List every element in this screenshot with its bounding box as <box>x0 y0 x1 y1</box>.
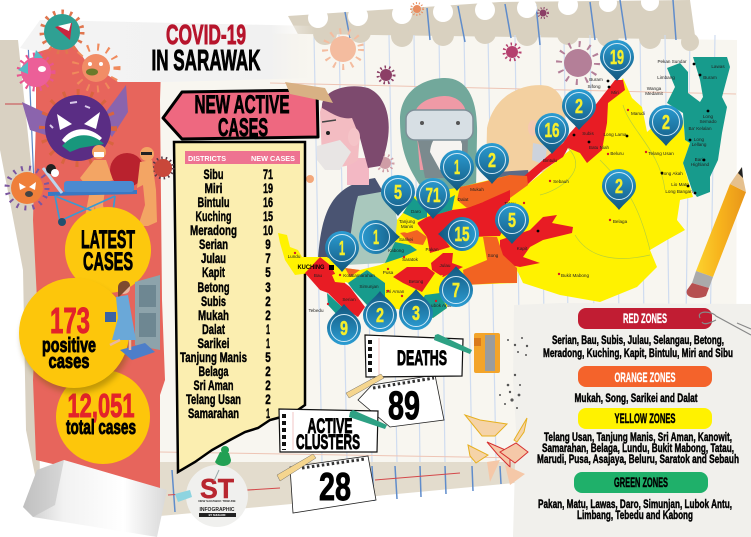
icon: orange angry virus <box>7 168 47 208</box>
tape: deaths teal <box>434 334 472 354</box>
map: place labels: Sebauh <box>553 179 569 184</box>
map: place labels: Long Lama <box>604 132 627 137</box>
table rows: 5 <box>265 349 271 365</box>
pin: Kapit 5 <box>495 203 529 244</box>
table rows: Sri Aman <box>194 377 234 393</box>
map: place labels: Samarahan <box>351 273 375 278</box>
map: place labels: Long Bangan <box>665 189 693 194</box>
tape: clusters yellow <box>277 454 316 481</box>
pin: Betong 3 <box>399 289 433 330</box>
map: red zone Kapit <box>500 215 573 267</box>
table rows: Dalat <box>202 321 225 337</box>
icon: green pushpin <box>214 446 231 481</box>
map: red zone Betong <box>393 267 435 292</box>
callout: latest cases: CASES <box>83 248 133 276</box>
table rows: Samarahan <box>188 405 239 421</box>
legend: yellow zones <box>537 408 739 466</box>
callout: positive cases <box>19 278 131 393</box>
icon: orange virus <box>75 47 117 89</box>
map: place labels: Batu Niah <box>589 145 610 150</box>
table header: DISTRICTS <box>188 156 226 163</box>
pin: Bintulu 16: 16 <box>544 120 560 142</box>
map: place labels: Buram <box>703 75 717 80</box>
map: green zone Daro <box>403 197 427 220</box>
map: place labels: Tanjung <box>399 219 415 224</box>
note: deaths number: 89 <box>388 384 420 428</box>
map: place labels: Pusa <box>383 270 394 275</box>
map: place labels: Telang Usan <box>648 151 674 156</box>
table rows: Subis <box>201 293 226 309</box>
table rows: 1 <box>266 321 270 337</box>
legend: orange zones: Mukah, Song, Sarikei and Dalat <box>574 391 698 405</box>
map: place labels: Bintulu <box>543 158 557 163</box>
map: red zone central <box>427 190 510 240</box>
pin: Serian 9: 9 <box>340 318 348 340</box>
icon: teal virus <box>42 12 82 52</box>
table header <box>185 151 300 164</box>
title <box>152 19 261 77</box>
map: yellow zone Sri Aman <box>387 285 413 310</box>
map: place labels: Long <box>703 114 714 119</box>
pin: Bintulu 16 <box>535 113 569 154</box>
map: green zone Lubok Antu <box>417 293 447 318</box>
map: yellow base central and west <box>327 175 520 318</box>
map: green zone Simunjan <box>348 270 385 305</box>
map: place labels: Lubok Antu <box>428 303 452 308</box>
tape: clusters teal <box>349 410 387 429</box>
table rows: Sarikei <box>198 335 230 351</box>
map: green zone Tebedu <box>327 293 357 318</box>
icon: safety pin <box>699 312 751 335</box>
callout: latest cases: LATEST <box>81 226 135 254</box>
map: place labels: Limbang <box>657 75 675 80</box>
illustration: stretcher and medics <box>43 145 157 226</box>
table rows: Meradong <box>190 222 237 238</box>
map: place labels: Subis <box>582 131 594 136</box>
table rows: Telang Usan <box>186 391 241 407</box>
map: place labels: Wanga <box>647 86 662 91</box>
table rows: 2 <box>265 293 271 309</box>
legend: green zones <box>538 472 732 522</box>
tape: deaths yellow <box>346 374 384 398</box>
legend: green zones: Limbang, Tebedu and Kabong <box>577 508 693 522</box>
map: place labels: Betong <box>409 279 424 284</box>
note: active clusters label <box>279 409 378 454</box>
map: green zone Matu <box>435 195 455 215</box>
map: place labels: Medamit <box>645 91 664 96</box>
icon: pencil sharpener <box>474 333 500 373</box>
map: red zone Miri Bintulu coast <box>523 80 625 185</box>
pin: Sibu 71 <box>416 178 450 219</box>
map: green zones north east <box>667 57 730 197</box>
pin: Betong 3: 3 <box>412 303 420 325</box>
title: IN SARAWAK <box>152 45 261 77</box>
map: place labels: Pakan <box>425 247 439 252</box>
note: deaths number <box>358 375 444 428</box>
map: place labels: Julau <box>440 263 451 268</box>
heading: new active cases <box>194 91 290 142</box>
table rows: Belaga <box>198 363 229 379</box>
pin: Samarahan 1 <box>325 231 359 272</box>
table rows: Serian <box>199 236 228 252</box>
pin: Dalat 1 <box>440 150 474 191</box>
pin: Samarahan 1: 1 <box>339 238 345 260</box>
illustration: PPE medic <box>400 78 477 192</box>
map: orange zone small <box>345 268 360 277</box>
callout: positive cases: positive <box>42 335 96 357</box>
legend: orange zones: ORANGE ZONES <box>614 369 676 385</box>
map: place labels: Lundu <box>288 254 301 259</box>
table rows: 2 <box>265 391 271 407</box>
map: orange zone Song <box>463 237 517 285</box>
map: place labels: Kabong <box>388 248 404 253</box>
legend: yellow zones: YELLOW ZONES <box>614 410 676 426</box>
map: place labels: Sri Aman <box>386 289 405 294</box>
table rows: 1 <box>266 405 270 421</box>
logo: ST infographic badge: BY SHUHAIDI <box>209 513 226 517</box>
pin: Tanjung Manis 5 <box>381 175 415 216</box>
logo: ST infographic badge: NEW SARAWAK TRIBUNE <box>198 499 236 503</box>
panel: red side strip <box>33 38 165 490</box>
icon: purple virus monster <box>22 85 128 164</box>
note: clusters number <box>290 456 376 513</box>
map: place labels: Long Akah <box>661 171 683 176</box>
table rows: Tanjung Manis <box>180 349 247 365</box>
pin: Meradong 15 <box>438 217 479 251</box>
map: place labels: Belaga <box>613 219 628 224</box>
map: yellow zone Pusa <box>380 257 417 283</box>
map: place labels: Miri <box>611 90 619 95</box>
icon: pink virus <box>18 50 53 89</box>
map: district borders <box>540 105 665 258</box>
pin: Sri Aman 2: 2 <box>376 305 384 327</box>
table rows: 1 <box>266 335 270 351</box>
icon: pencil shavings <box>465 415 528 485</box>
map: place labels: Simunjan <box>359 284 379 289</box>
pin: Subis 2 <box>562 89 596 130</box>
table rows: 16 <box>263 194 273 210</box>
map: place labels: KUCHING <box>298 264 324 271</box>
table rows: Mukah <box>198 307 229 323</box>
title torn paper band <box>20 20 315 82</box>
pin: Tanjung Manis 5: 5 <box>394 182 402 204</box>
icon: red small virus <box>153 158 173 178</box>
note: active clusters label: ACTIVE <box>308 415 352 438</box>
tape on tag <box>285 82 333 103</box>
map: place labels: Beluru <box>610 151 624 156</box>
map: yellow zone Tanjung Manis <box>397 213 418 233</box>
logo: ST infographic badge: ST <box>200 473 234 504</box>
callout: total cases: 12,051 <box>68 387 134 424</box>
map: yellow zone Kota <box>332 272 348 283</box>
pin: Mukah 2 <box>475 143 509 184</box>
note: deaths label <box>365 335 463 377</box>
table header: NEW CASES <box>251 156 295 163</box>
illustration: woman leaving door <box>105 275 160 360</box>
table rows: 2 <box>265 363 271 379</box>
map: green zone Kabong <box>385 242 417 263</box>
callout: positive cases: cases <box>48 351 90 373</box>
table rows: 5 <box>265 264 271 280</box>
icon: pencil <box>687 167 746 298</box>
map: place labels: Sifong <box>587 84 601 89</box>
map: place labels: Kapit <box>517 246 528 251</box>
map: place labels: Bau <box>314 273 323 278</box>
pin: Subis 2: 2 <box>575 96 583 118</box>
pin: Sarikei 1: 1 <box>373 227 379 249</box>
table rows: Betong <box>198 279 230 295</box>
map: yellow zone Tatau <box>450 237 487 267</box>
note: deaths label: DEATHS <box>397 347 447 370</box>
pin: Sarikei 1 <box>359 220 400 254</box>
pin: Miri 19 <box>600 40 634 81</box>
map: place labels: Saratok <box>402 257 419 262</box>
map: place labels: Lawas <box>711 64 725 69</box>
table rows <box>180 166 273 421</box>
legend: orange zones <box>574 366 712 405</box>
map: red zone Meradong <box>417 217 450 253</box>
map of Sarawak <box>278 57 730 318</box>
map: place labels: Daro <box>411 209 421 214</box>
note: clusters number: 28 <box>319 466 351 509</box>
map: place labels: Sarikei <box>399 237 413 242</box>
map: red zone Bau Kuching Serian <box>305 257 365 317</box>
table rows: Bintulu <box>198 194 230 210</box>
table rows: 15 <box>263 208 273 224</box>
logo: ST infographic badge <box>175 465 248 527</box>
callout: positive cases: 173 <box>50 300 90 341</box>
heading: new active cases: NEW ACTIVE <box>194 91 290 119</box>
logo: ST infographic badge: INFOGRAPHIC <box>200 507 235 513</box>
pin: Dalat 1: 1 <box>454 157 460 179</box>
table rows: Miri <box>204 180 222 196</box>
map: place labels: Manis <box>401 224 414 229</box>
map: place labels: Song <box>488 253 499 258</box>
map: place labels: Tebedu <box>308 308 324 313</box>
map: place labels: Kota <box>343 273 353 278</box>
map: place labels: Highland <box>691 162 710 167</box>
lined paper sheet <box>160 0 737 512</box>
callout: latest cases <box>65 207 151 293</box>
pin: Belaga 2: 2 <box>615 176 623 198</box>
pin: Serian 9 <box>327 304 361 345</box>
table rows: 2 <box>265 307 271 323</box>
map: orange zone Sarikei <box>400 230 427 245</box>
callout: total cases <box>56 370 150 464</box>
legend: red zones: RED ZONES <box>623 310 667 326</box>
map: place labels <box>288 59 725 313</box>
callout: total cases: total cases <box>66 417 136 439</box>
panel: districts table <box>174 142 305 472</box>
map: place labels: Bario <box>695 157 706 162</box>
map: place labels: Tatau <box>504 201 516 206</box>
map: yellow zones east <box>488 78 693 302</box>
panel: new active cases tag <box>163 90 318 139</box>
pin: Sibu 71: 71 <box>426 185 440 207</box>
pin: Meradong 15: 15 <box>454 224 470 246</box>
map: place labels: Lellang <box>692 142 707 147</box>
map: place labels: Ba' Kelalan <box>688 126 712 131</box>
illustration: blonde person <box>486 85 565 182</box>
map: place labels: Pekan Sundar <box>657 59 687 64</box>
table rows: 71 <box>263 166 273 182</box>
map: yellow zone Saratok <box>410 243 445 267</box>
legend: green zones: GREEN ZONES <box>614 474 668 490</box>
heading: new active cases: CASES <box>218 114 268 142</box>
map: place labels: Mukah <box>470 187 484 192</box>
table rows: Kuching <box>196 208 232 224</box>
pencil debris specks <box>499 337 528 409</box>
illustration: masked man <box>317 86 404 265</box>
pin: Miri 19: 19 <box>610 47 624 69</box>
pin: Mukah 2: 2 <box>488 150 496 172</box>
title: COVID-19 <box>166 19 246 50</box>
table rows: Julau <box>201 250 226 266</box>
map: place labels: Semado <box>699 119 717 124</box>
pin: Julau 7 <box>439 266 473 307</box>
map: place labels: Marudi <box>631 111 645 116</box>
table rows: 7 <box>265 250 271 266</box>
table rows: Kapit <box>202 264 225 280</box>
map: place labels: Serian <box>342 297 356 302</box>
map: place labels: Buram <box>589 77 603 82</box>
map: orange zone Mukah Dalat <box>457 175 528 208</box>
map: red zone Julau <box>431 253 463 277</box>
map: yellow sliver <box>423 275 443 293</box>
pin: Belaga 2 <box>602 169 636 210</box>
panel: zones paper <box>513 303 751 537</box>
map: yellow zone Lundu <box>278 233 330 275</box>
pin: Julau 7: 7 <box>452 280 460 302</box>
decorative paper viruses <box>306 3 597 183</box>
pin: Kapit 5: 5 <box>508 210 516 232</box>
table rows: Sibu <box>204 166 224 182</box>
curled paper corner <box>23 460 167 537</box>
note: active clusters label: CLUSTERS <box>296 431 360 454</box>
map: place labels: Lio Mato <box>671 182 689 187</box>
table rows: 19 <box>263 180 273 196</box>
table rows: 9 <box>265 236 271 252</box>
table rows: 10 <box>263 222 273 238</box>
pin: Sri Aman 2 <box>363 291 397 332</box>
pin: Telang Usan 2 <box>649 105 683 146</box>
map: place labels: Bukit Mabong <box>561 273 589 278</box>
pin: Telang Usan 2: 2 <box>662 112 670 134</box>
map: place labels: Dalat <box>458 197 469 202</box>
legend: red zones <box>543 308 733 360</box>
table rows: 2 <box>265 377 271 393</box>
table rows: 3 <box>265 279 271 295</box>
map: place labels: Long <box>694 137 705 142</box>
